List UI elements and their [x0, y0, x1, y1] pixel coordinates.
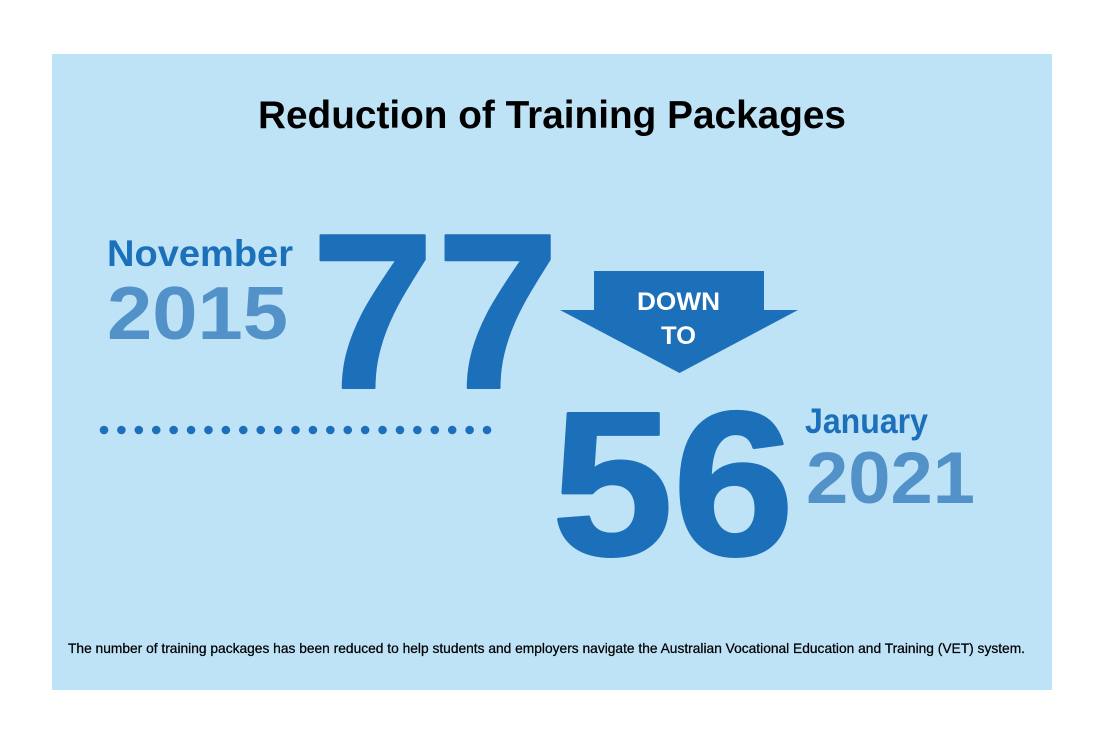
arrow: down to: DOWN [637, 288, 720, 316]
end date label: January [805, 402, 928, 441]
arrow: down to: TO [661, 322, 696, 350]
end date label: 2021 [806, 438, 975, 519]
end date label [805, 402, 975, 519]
arrow: down to [560, 271, 798, 373]
start date label: November [107, 233, 293, 274]
start date label: 2015 [107, 271, 288, 355]
number 77: 77 [311, 188, 559, 436]
dotted divider [104, 426, 488, 434]
number 56: 56 [552, 370, 794, 598]
title: Reduction of Training Packages [258, 94, 846, 137]
footnote: The number of training packages has been reduced to help students and employers navigate the Australian Vocational Education and Training (VET) system. [68, 640, 1025, 656]
start date label [107, 233, 293, 355]
panel: background [52, 54, 1052, 690]
